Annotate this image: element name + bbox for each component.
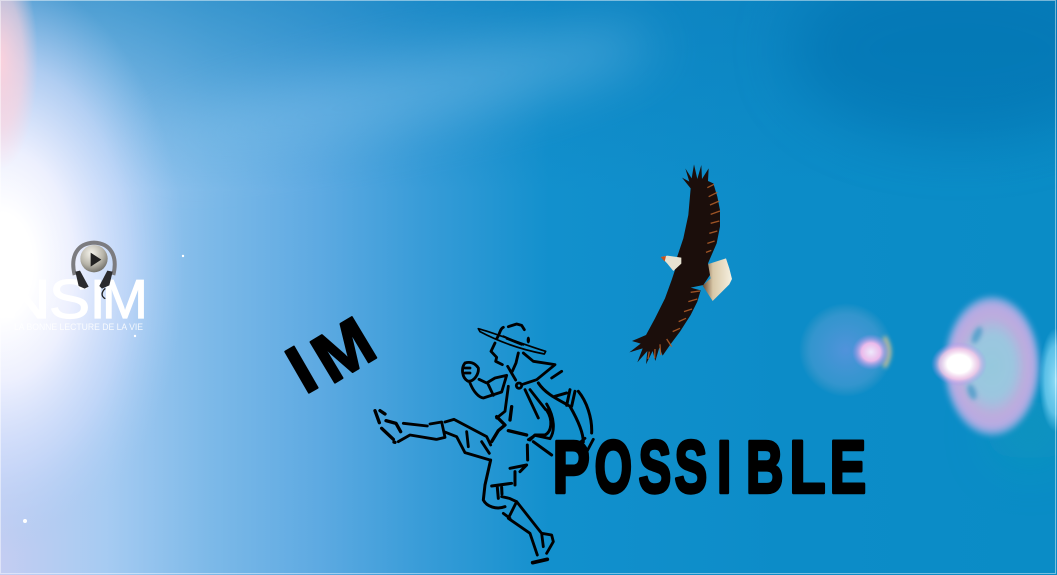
text: POSSIBLE: L [789, 426, 826, 509]
eagle wings and body [629, 164, 720, 364]
scout lower body [375, 407, 553, 563]
scout shorts [483, 460, 527, 508]
logo wordmark: N [3, 268, 51, 330]
eagle feather highlights [648, 184, 720, 359]
scout kicking leg [398, 422, 445, 442]
logo wordmark: I [90, 268, 105, 330]
scout standing leg [502, 497, 553, 555]
text: IM: I [274, 332, 329, 408]
lens flare: large disc [931, 296, 1040, 436]
eagle tail [703, 258, 732, 301]
text: POSSIBLE: S [639, 426, 671, 509]
logo wordmark: M [102, 268, 148, 330]
text: POSSIBLE: E [830, 425, 866, 508]
scout neckerchief [516, 353, 562, 418]
illustration: soaring eagle [629, 164, 732, 364]
eagle head [661, 256, 681, 271]
scout face and neck [491, 343, 518, 380]
scout fist [463, 362, 478, 381]
sun glare [0, 0, 190, 575]
illustration: kicking scout [375, 324, 593, 563]
logo: NSIM [3, 243, 148, 332]
scout hand [578, 438, 593, 452]
scout waist [492, 407, 527, 442]
scout thigh and shorts [444, 419, 491, 460]
text: POSSIBLE: S [675, 426, 707, 509]
text: POSSIBLE: I [717, 425, 731, 509]
lens flare: right edge [1039, 328, 1057, 432]
lens flare: small disc [799, 303, 893, 397]
scout upper body [463, 324, 592, 442]
logo wordmark [3, 268, 148, 330]
scout belt gear [527, 410, 552, 460]
scout sole [533, 559, 547, 563]
scout rear arm [538, 383, 592, 442]
scout kicking foot [375, 411, 401, 442]
text: POSSIBLE: P [553, 426, 590, 508]
scout hat [478, 324, 546, 354]
scout torso [497, 386, 553, 440]
icon: headphones with play button [73, 243, 115, 299]
text: POSSIBLE: O [595, 427, 632, 509]
text: IM: M [299, 302, 388, 398]
eagle beak [661, 256, 666, 262]
scout front arm [470, 375, 507, 398]
logo tagline: LA BONNE LECTURE DE LA VIE [14, 322, 143, 332]
text: POSSIBLE [553, 425, 866, 509]
text: POSSIBLE: B [746, 425, 783, 509]
logo wordmark: S [49, 269, 90, 330]
